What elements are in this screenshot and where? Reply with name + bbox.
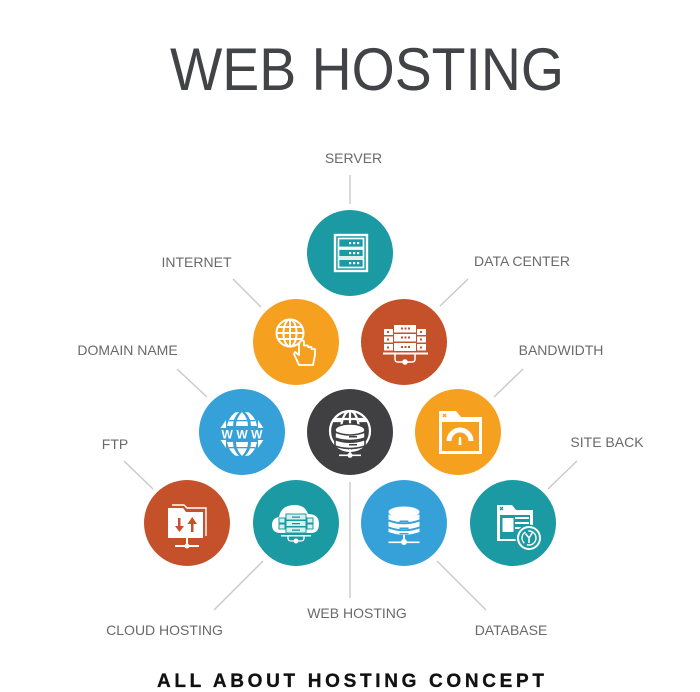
- icon: ftp: [144, 480, 230, 566]
- label: internet: INTERNET: [162, 254, 232, 270]
- label: server: SERVER: [325, 150, 382, 166]
- label: bandwidth: BANDWIDTH: [519, 342, 603, 358]
- icon: domain name: [199, 389, 285, 475]
- title: WEB HOSTING: [170, 36, 564, 103]
- icon: site back: [470, 480, 556, 566]
- label: database: DATABASE: [475, 622, 547, 638]
- icon: data center: [361, 299, 447, 385]
- icon: internet: [253, 299, 339, 385]
- label: site back: SITE BACK: [570, 434, 644, 450]
- icon: web hosting center: [307, 389, 393, 475]
- icon: cloud hosting: [253, 480, 339, 566]
- label: domain name: DOMAIN NAME: [77, 342, 178, 358]
- icon: server: [307, 210, 393, 296]
- connector lines: [124, 175, 577, 610]
- label: cloud hosting: CLOUD HOSTING: [106, 622, 223, 638]
- label: web hosting: WEB HOSTING: [307, 605, 407, 621]
- icon: database: [361, 480, 447, 566]
- icon: bandwidth: [415, 389, 501, 475]
- icon: domain name: WWW: [222, 428, 263, 442]
- subtitle: ALL ABOUT HOSTING CONCEPT: [157, 671, 544, 692]
- label: ftp: FTP: [102, 436, 128, 452]
- label: data center: DATA CENTER: [474, 253, 570, 269]
